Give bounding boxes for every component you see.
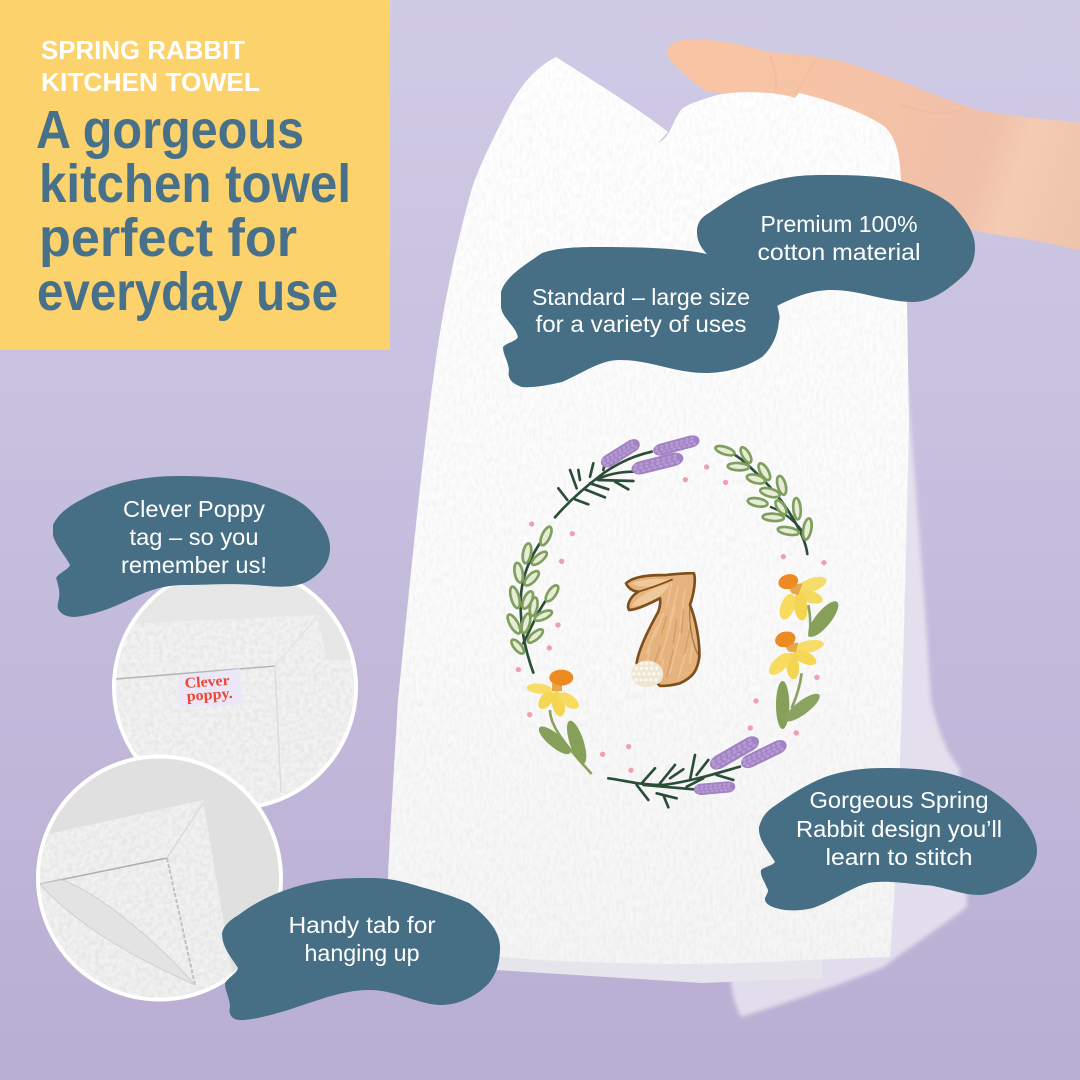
title panel: [0, 0, 390, 350]
callout: clever poppy tag: [53, 476, 330, 617]
circle 2 photo: [40, 758, 279, 998]
callout: hanging tab: [222, 878, 500, 1020]
wreath: pink french knots: [516, 464, 827, 773]
headline: kitchen towel: [39, 154, 351, 214]
callout: spring rabbit design: Gorgeous Spring: [810, 787, 988, 813]
hanging tab: [40, 880, 195, 985]
headline: everyday use: [37, 262, 338, 322]
callout: large size: Standard – large size: [532, 284, 750, 310]
towel front: [385, 57, 909, 964]
callout: hanging tab: hanging up: [304, 940, 420, 966]
clever poppy label: Clever: [184, 673, 231, 692]
callout: spring rabbit design: learn to stitch: [826, 844, 972, 870]
callout: spring rabbit design: Rabbit design you’ll: [796, 816, 1002, 842]
callout: clever poppy tag: tag – so you: [130, 524, 258, 550]
callout: hanging tab: Handy tab for: [288, 912, 436, 938]
clever poppy label: [178, 669, 242, 708]
headline: A gorgeous: [36, 100, 304, 160]
callout: spring rabbit design: [759, 768, 1037, 910]
headline: [36, 100, 351, 322]
rabbit: [626, 573, 699, 686]
callout: clever poppy tag: Clever Poppy: [123, 496, 266, 522]
hand holding the towel: [667, 39, 1080, 250]
wreath: right top flower and leaf: [776, 572, 843, 641]
subtitle: [41, 35, 260, 97]
subtitle: SPRING RABBIT: [41, 35, 245, 65]
callout: cotton material: Premium 100%: [760, 211, 918, 237]
wreath: right lower flower and leaves: [765, 629, 825, 729]
wreath: lower left flower and leaves: [526, 670, 592, 774]
callout: clever poppy tag: remember us!: [121, 552, 267, 578]
callout: cotton material: cotton material: [758, 239, 920, 265]
wreath: left leaf sprig: [505, 525, 561, 673]
callout: large size: for a variety of uses: [536, 311, 746, 337]
callout: large size: [501, 247, 780, 387]
circle 1 photo: [116, 584, 354, 804]
wreath: top right leaf sprig: [714, 444, 813, 554]
embroidered wreath: [505, 434, 843, 807]
callout: cotton material: [697, 175, 975, 307]
tag detail circle: [112, 584, 358, 808]
folded hem under towel: [496, 955, 822, 983]
towel back layer: [730, 380, 967, 1017]
headline: perfect for: [39, 208, 297, 268]
wreath: top left lavender sprig: [555, 434, 701, 517]
towel: [385, 57, 967, 1017]
clever poppy label: poppy.: [186, 686, 233, 705]
subtitle: KITCHEN TOWEL: [41, 67, 260, 97]
rabbit tail: [631, 661, 663, 687]
wreath: bottom lavender sprig: [608, 733, 789, 807]
hanging tab detail circle: [30, 754, 285, 1005]
